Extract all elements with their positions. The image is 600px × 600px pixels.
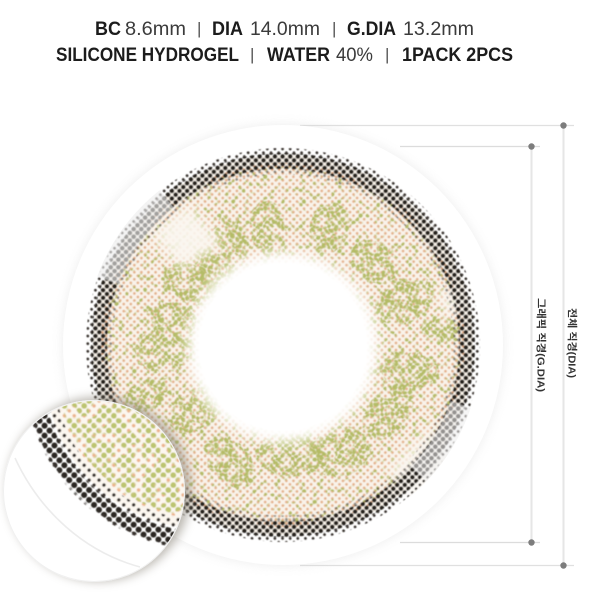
- magnified lens detail: [32, 401, 184, 546]
- title: lens specifications: WATER: [267, 45, 330, 66]
- lighter ring sections: [107, 198, 166, 280]
- title: lens specifications: 8.6mm: [125, 19, 186, 40]
- title: lens specifications: SILICONE HYDROGEL: [56, 45, 239, 66]
- label: graphic diameter: 그래픽 직경(G.DIA): [534, 298, 548, 392]
- magnifier lens edge highlight: [15, 458, 140, 567]
- pupil opening: [188, 252, 378, 442]
- title: lens specifications: 1PACK 2PCS: [402, 45, 513, 66]
- title: lens specifications: 14.0mm: [250, 19, 320, 40]
- title: lens specifications: 13.2mm: [403, 19, 474, 40]
- title: lens specifications: |: [250, 45, 254, 64]
- label: total diameter: 전체 직경(DIA): [566, 308, 578, 378]
- dimension lines: graphic diameter: [400, 143, 540, 546]
- magnifier callout: [1, 392, 196, 587]
- magnifier disc: [3, 400, 185, 582]
- pale wedges: [150, 205, 466, 500]
- lens backing disc: [62, 124, 504, 566]
- scattered green flecks: [105, 167, 461, 523]
- title: lens specifications: G.DIA: [347, 19, 396, 40]
- title: lens specifications: |: [385, 45, 389, 64]
- title: lens specifications: DIA: [212, 19, 243, 40]
- lens tint: [93, 155, 473, 535]
- title: lens specifications: BC: [95, 19, 121, 40]
- magnifier shadow: [7, 397, 191, 581]
- title: lens specifications: 40%: [336, 45, 373, 66]
- dimension lines: total diameter: [300, 122, 574, 569]
- peach dot field: [101, 163, 465, 527]
- green iris blotches: [120, 198, 460, 497]
- contact lens halftone graphic: [88, 150, 478, 540]
- title: lens specifications: |: [197, 19, 201, 38]
- title: lens specifications: |: [332, 19, 336, 38]
- title: lens specifications: [56, 19, 513, 66]
- dark limbal ring: [109, 171, 457, 519]
